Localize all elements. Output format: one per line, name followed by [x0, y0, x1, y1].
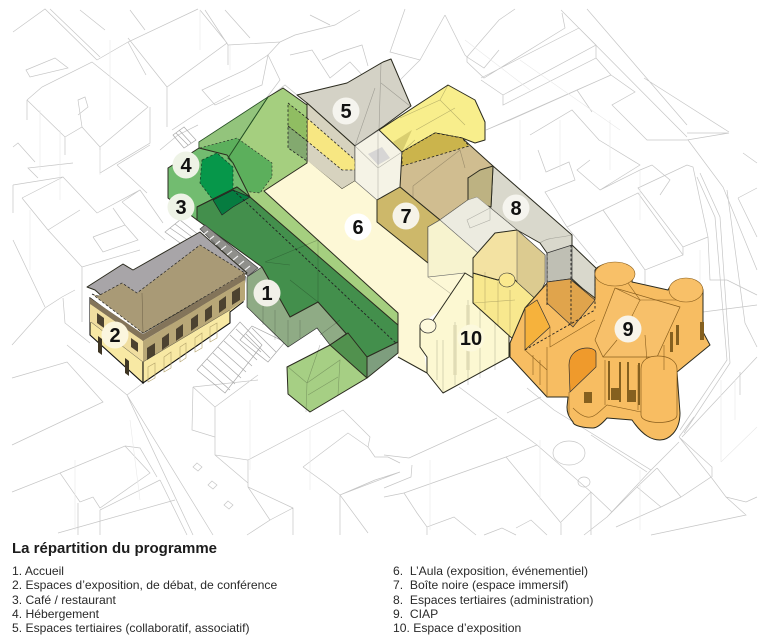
- block 9: CIAP: [510, 245, 710, 440]
- badge 8: 8: [510, 198, 522, 220]
- legend: items 6 to 10: 10. Espace d’exposition: [393, 621, 521, 635]
- legend: items 1 to 5: 1. Accueil: [12, 564, 64, 578]
- badge 7: 7: [400, 206, 412, 228]
- surrounding city context lines: [12, 9, 757, 535]
- block 1: reception, dark green wing: [197, 187, 398, 378]
- legend heading: La répartition du programme: [12, 540, 217, 557]
- number badges: [102, 98, 642, 352]
- building 5: tertiary collaborative space: [297, 59, 411, 189]
- glazed link between 5 and 7: [355, 130, 402, 200]
- badge 1: 1: [261, 283, 273, 305]
- badge 9: 9: [622, 319, 634, 341]
- stairs near Café: [165, 127, 200, 248]
- badge 3: [168, 194, 194, 220]
- legend: items 1 to 5: 5. Espaces tertiaires (collaboratif, associatif): [12, 621, 250, 635]
- legend: items 1 to 5: 3. Café / restaurant: [12, 593, 116, 607]
- legend: items 6 to 10: 7. Boîte noire (espace immersif): [393, 578, 568, 592]
- badge 2: 2: [109, 325, 121, 347]
- badge 8: [502, 194, 530, 222]
- yellow gable volume: [473, 230, 545, 350]
- badge 10: [458, 324, 484, 352]
- block: yellow roof volume: [379, 85, 485, 152]
- badge 4: [172, 152, 200, 178]
- legend: items 1 to 5: 2. Espaces d’exposition, de débat, de conférence: [12, 578, 277, 592]
- block 8: tertiary administration: [440, 166, 598, 300]
- legend: items 6 to 10: 9. CIAP: [393, 607, 438, 621]
- badge 3: 3: [175, 197, 187, 219]
- badge 2: [102, 322, 128, 348]
- gallery bridge between 1 and 2: [200, 225, 258, 276]
- block 6: the Aula: [264, 161, 473, 373]
- building body and towers: [510, 263, 710, 440]
- badge 7: [392, 202, 420, 230]
- badge 10: 10: [460, 328, 482, 350]
- volume beside 7: [428, 220, 478, 290]
- legend: items 6 to 10: 6. L’Aula (exposition, événementiel): [393, 564, 588, 578]
- legend: items 6 to 10: [393, 564, 593, 635]
- badge 1: [254, 280, 280, 306]
- badge 5: 5: [340, 101, 352, 123]
- badge 6: [344, 214, 372, 240]
- building 2: exhibition, debate and conference spaces: [87, 232, 247, 383]
- stairs near Accueil: [197, 322, 285, 393]
- lower annex, light green: [287, 333, 367, 412]
- badge 9: [614, 316, 642, 342]
- block 7: black box: [377, 133, 493, 263]
- legend: items 1 to 5: 4. Hébergement: [12, 607, 99, 621]
- legend: items 6 to 10: 8. Espaces tertiaires (administration): [393, 593, 593, 607]
- badge 4: 4: [180, 155, 192, 177]
- legend: items 1 to 5: [12, 564, 277, 635]
- badge 5: [332, 98, 360, 124]
- block 10: exhibition space: [420, 273, 515, 393]
- badge 6: 6: [352, 217, 364, 239]
- blocks 3 and 4: hotel and café, green volumes: [168, 88, 398, 342]
